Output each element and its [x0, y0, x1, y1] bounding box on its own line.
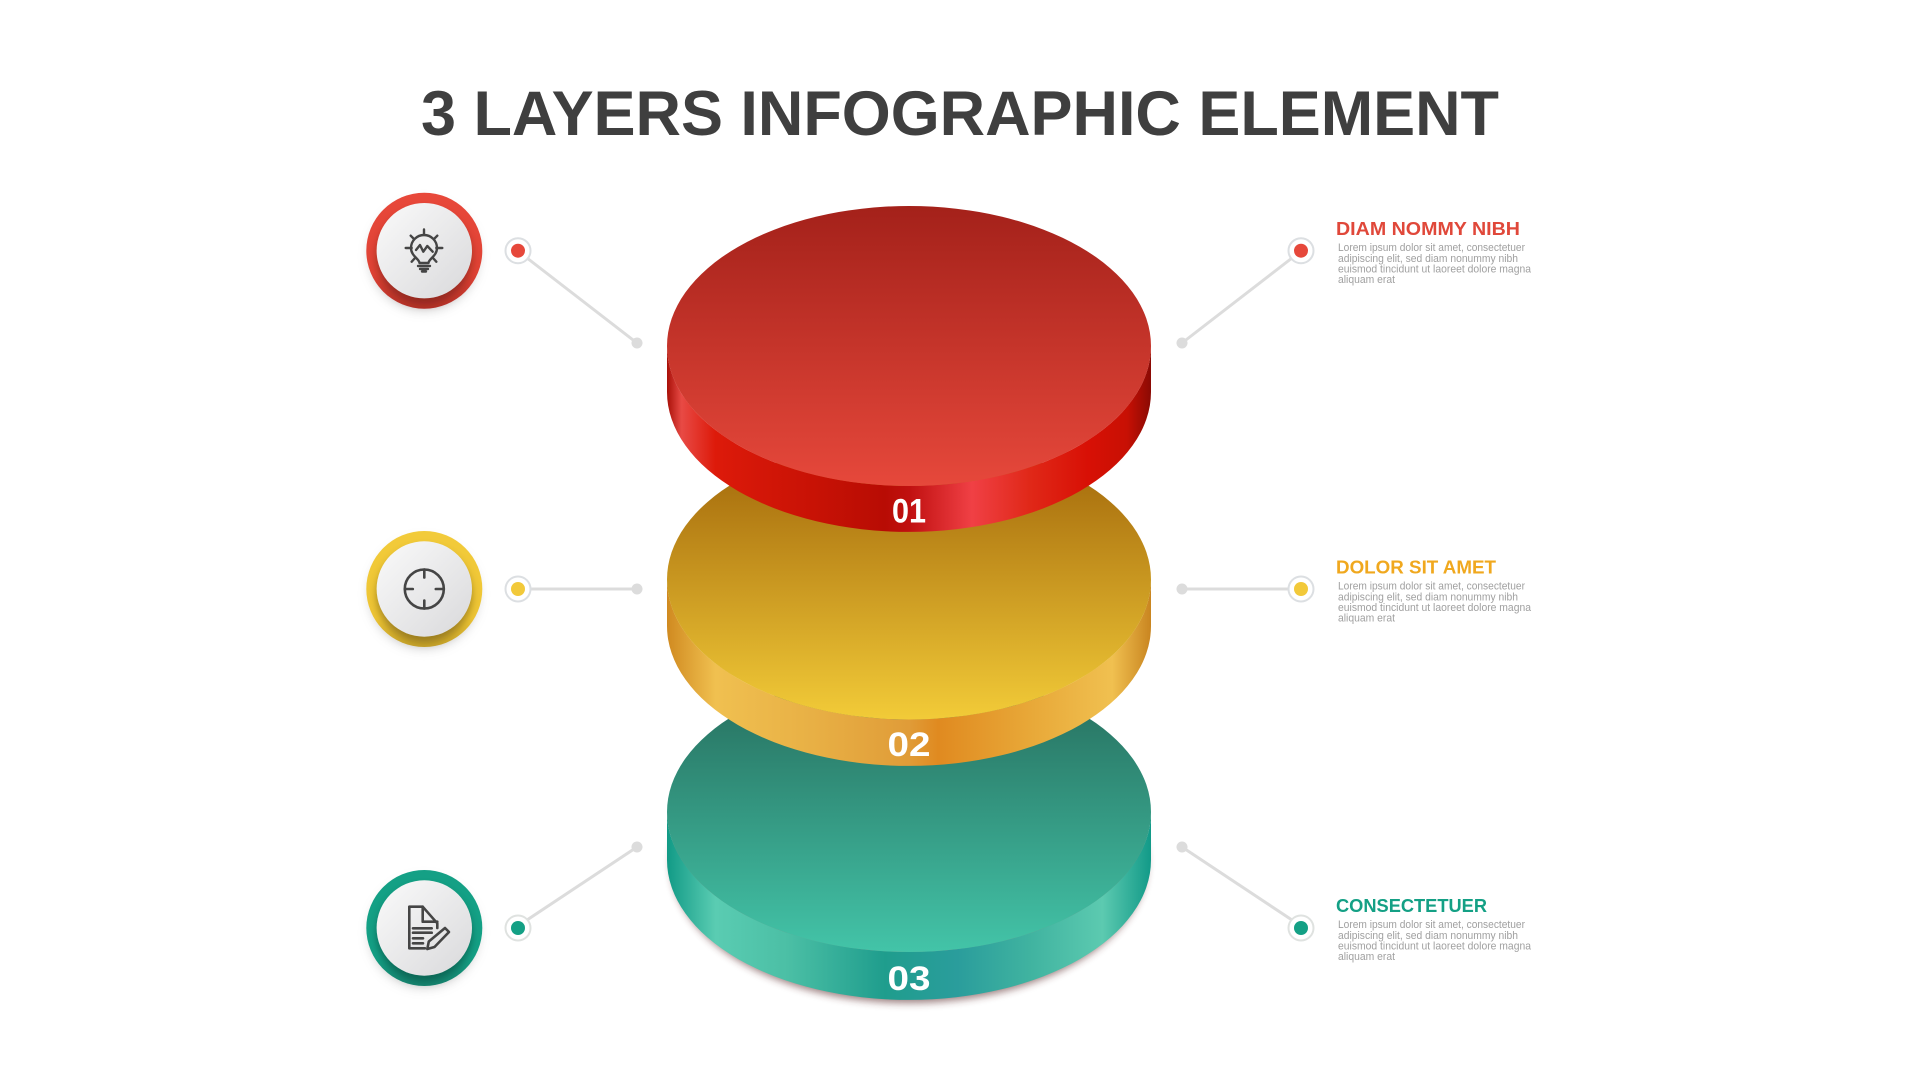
- body copy: [1338, 242, 1531, 286]
- body copy: euismod tincidunt ut laoreet dolore magna: [1338, 602, 1531, 614]
- icon: light bulb: [406, 230, 442, 272]
- body copy: [1338, 580, 1531, 624]
- body copy: euismod tincidunt ut laoreet dolore magna: [1338, 264, 1531, 276]
- number 02: 02: [888, 726, 930, 764]
- heading: DOLOR SIT AMET: [1336, 558, 1496, 578]
- connector: right middle: [1176, 576, 1314, 602]
- body copy: aliquam erat: [1338, 274, 1395, 286]
- body copy: [1338, 919, 1531, 963]
- number 03: 03: [888, 960, 930, 998]
- connector: left top: [506, 238, 642, 348]
- body copy: adipiscing elit, sed diam nonummy nibh: [1338, 592, 1518, 604]
- layer 03 disc: [667, 672, 1151, 1003]
- left icon badge: document and pencil: [366, 870, 482, 989]
- body copy: adipiscing elit, sed diam nonummy nibh: [1338, 930, 1518, 942]
- text block: consectetuer: [1336, 896, 1531, 963]
- left icon badge: target: [366, 531, 482, 650]
- connector: left bottom: [506, 842, 642, 940]
- number 01: 01: [892, 492, 926, 530]
- body copy: adipiscing elit, sed diam nonummy nibh: [1338, 253, 1518, 265]
- connector: left middle: [506, 576, 642, 602]
- layer 01 disc: [667, 206, 1151, 532]
- body copy: Lorem ipsum dolor sit amet, consectetuer: [1338, 580, 1525, 592]
- connector: right bottom: [1176, 842, 1314, 940]
- icon: target: [405, 570, 444, 608]
- title: 3 LAYERS INFOGRAPHIC ELEMENT: [421, 79, 1499, 149]
- body copy: aliquam erat: [1338, 612, 1395, 624]
- text block: dolor sit amet: [1336, 558, 1531, 624]
- body copy: euismod tincidunt ut laoreet dolore magna: [1338, 940, 1531, 952]
- body copy: aliquam erat: [1338, 951, 1395, 963]
- connector: right top: [1176, 238, 1314, 348]
- heading: CONSECTETUER: [1336, 896, 1487, 916]
- layer 02 disc: [667, 440, 1151, 766]
- text block: diam nommy nibh: [1336, 219, 1531, 286]
- icon: document and pencil: [409, 907, 449, 949]
- heading: DIAM NOMMY NIBH: [1336, 219, 1520, 239]
- body copy: Lorem ipsum dolor sit amet, consectetuer: [1338, 242, 1525, 254]
- body copy: Lorem ipsum dolor sit amet, consectetuer: [1338, 919, 1525, 931]
- left icon badge: light bulb: [366, 193, 482, 312]
